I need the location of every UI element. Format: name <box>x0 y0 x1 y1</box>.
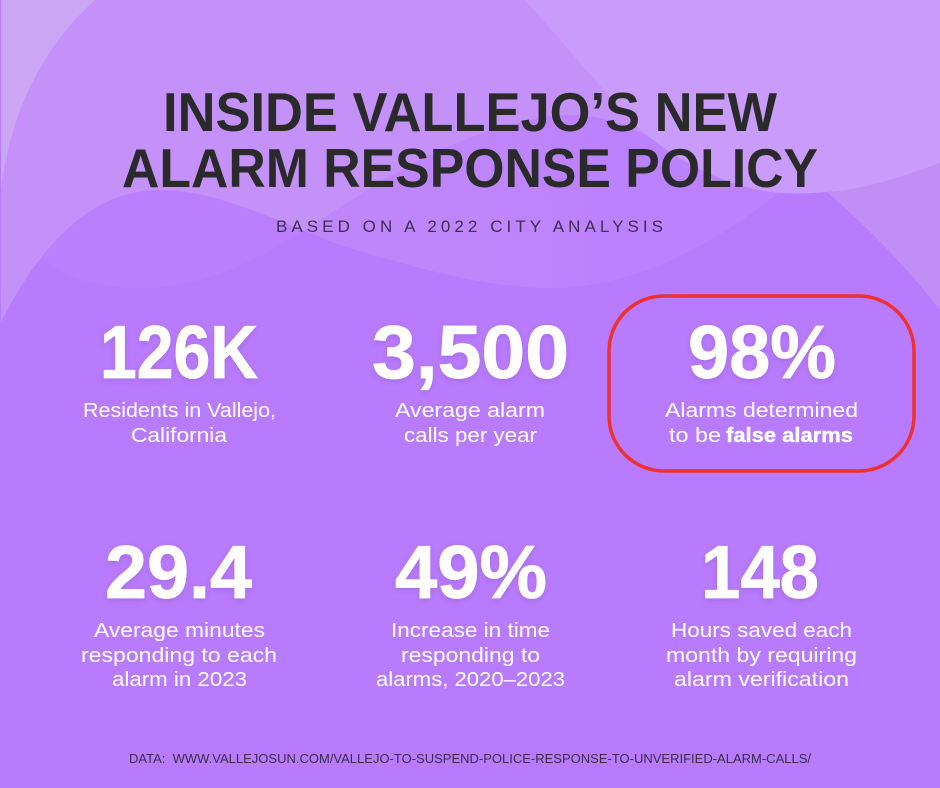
source footer: DATA: WWW.VALLEJOSUN.COM/VALLEJO-TO-SUSPEND-POLICE-RESPONSE-TO-UNVERIFIED-ALARM-CALLS/ <box>129 752 812 766</box>
stat: alarm calls: calls per year <box>404 424 537 447</box>
stat: false alarms: Alarms determined <box>665 399 858 422</box>
stat: time increase: Increase in time <box>391 619 550 642</box>
stat: false alarms <box>665 310 858 447</box>
stat: hours saved: alarm verification <box>674 668 849 691</box>
stat: false alarms: false alarms <box>726 424 853 447</box>
stat: time increase: alarms, 2020–2023 <box>376 668 565 691</box>
title: ALARM RESPONSE POLICY <box>122 137 818 199</box>
stat: false alarms: 98% <box>688 310 836 394</box>
stat: hours saved: month by requiring <box>666 644 857 667</box>
title: INSIDE VALLEJO’S NEW <box>163 81 777 143</box>
stat: time increase <box>376 530 565 691</box>
stat: response minutes: alarm in 2023 <box>112 668 247 691</box>
stat: time increase: responding to <box>401 644 540 667</box>
stat: alarm calls: Average alarm <box>395 399 545 422</box>
stat: false alarms: to be <box>669 424 721 447</box>
stat: response minutes: responding to each <box>81 644 277 667</box>
highlight box: false alarms <box>609 296 914 471</box>
stat: response minutes: 29.4 <box>105 530 252 614</box>
stat: alarm calls: 3,500 <box>372 310 569 394</box>
stat: hours saved <box>666 530 857 691</box>
stat: alarm calls <box>372 310 569 447</box>
stat: hours saved: Hours saved each <box>671 619 852 642</box>
stat: response minutes: Average minutes <box>94 619 265 642</box>
subtitle: BASED ON A 2022 CITY ANALYSIS <box>276 217 663 236</box>
stat: time increase: 49% <box>395 530 547 614</box>
stat: residents: 126K <box>100 310 258 394</box>
stat: residents: California <box>131 424 228 447</box>
stat: residents: Residents in Vallejo, <box>83 399 276 422</box>
stat: hours saved: 148 <box>701 530 819 614</box>
title <box>122 81 818 199</box>
background wave shapes <box>1 0 940 330</box>
stat: residents <box>83 310 276 447</box>
stat: response minutes <box>81 530 277 691</box>
